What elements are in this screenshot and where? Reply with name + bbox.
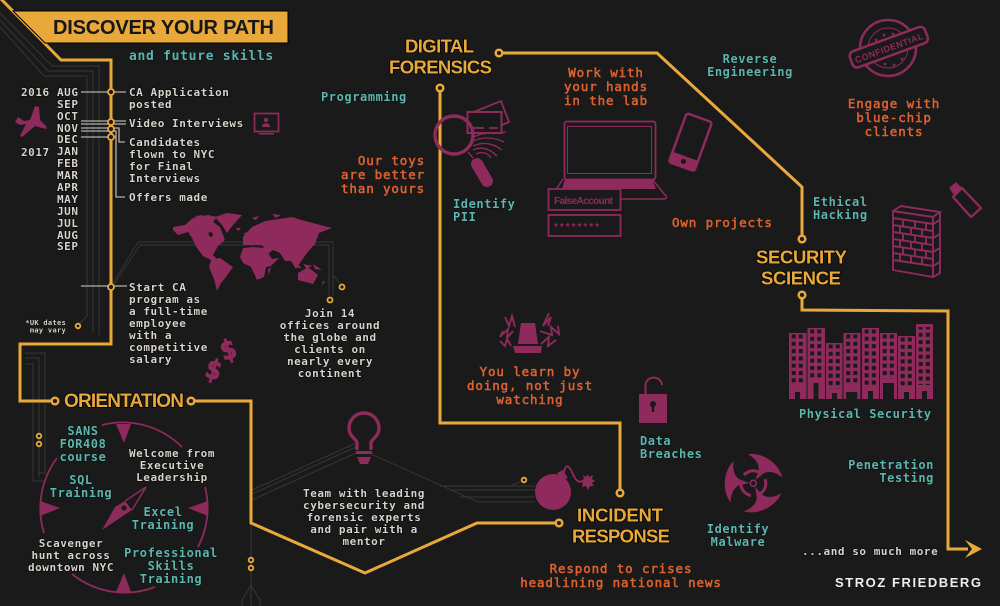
blue-chip text: blue-chip xyxy=(856,110,932,125)
icon: confidential stamp: ★ xyxy=(874,35,879,44)
timeline: start CA program text: program as xyxy=(129,293,201,306)
login box: username xyxy=(548,189,620,210)
year labels xyxy=(21,86,50,159)
timeline months: SEP xyxy=(57,98,79,111)
compass: professional skills: Skills xyxy=(148,559,194,573)
footnote: may vary xyxy=(30,326,66,334)
compass: welcome: Leadership xyxy=(136,471,208,484)
compass: scavenger: Scavenger xyxy=(39,537,103,550)
timeline: start CA program text: with a xyxy=(129,329,172,342)
digital forensics nodes xyxy=(437,50,502,91)
timeline months: JUN xyxy=(57,205,79,218)
login box: password xyxy=(548,215,620,236)
main yellow path: orientation to incident response xyxy=(191,401,557,573)
data breaches label: Breaches xyxy=(640,447,702,461)
icon: confidential stamp: CONFIDENTIAL xyxy=(854,31,925,65)
icon: dollar signs: $ xyxy=(201,353,226,388)
title banner: DISCOVER YOUR PATH xyxy=(53,17,274,39)
icon: magnifier with card and fingerprint xyxy=(435,101,509,181)
crises text: Respond to crises xyxy=(550,561,692,576)
icon: laptop xyxy=(550,122,666,199)
icon: open padlock xyxy=(639,378,667,423)
icon: confidential stamp: ★ xyxy=(900,54,905,63)
timeline months: OCT xyxy=(57,110,79,123)
timeline: candidates flown text: Interviews xyxy=(129,172,201,185)
login box: username: FalseAccount xyxy=(554,196,614,207)
timeline: start CA program text: salary xyxy=(129,353,172,366)
timeline: start CA program text: a full-time xyxy=(129,305,208,318)
digital forensics heading xyxy=(389,36,492,78)
timeline months: SEP xyxy=(57,240,79,253)
incident response heading xyxy=(572,504,670,546)
compass: welcome: Welcome from xyxy=(129,447,215,460)
penetration testing label: Testing xyxy=(879,471,934,485)
compass: excel: Excel xyxy=(143,505,183,519)
incident response heading: INCIDENT xyxy=(577,504,664,526)
penetration testing label: Penetration xyxy=(848,458,934,472)
timeline: candidates flown text: Candidates xyxy=(129,136,201,149)
compass: professional skills: Training xyxy=(140,572,202,586)
icon: airplane xyxy=(15,106,47,137)
title banner xyxy=(13,11,288,43)
hands-on text: in the lab xyxy=(564,93,648,108)
icon: brick wall xyxy=(893,206,940,277)
mentor text: and pair with a xyxy=(310,523,418,536)
learn by doing text: You learn by xyxy=(480,364,580,379)
timeline: video interviews text: Video Interviews xyxy=(129,117,244,130)
Stroz Friedberg logo: STROZ FRIEDBERG xyxy=(835,575,981,590)
timeline months: NOV xyxy=(57,122,79,135)
timeline months: AUG xyxy=(57,86,79,99)
footnote: *UK dates xyxy=(25,319,66,327)
login box: password: ******** xyxy=(554,222,599,233)
icon: confidential stamp: ★ xyxy=(891,29,896,38)
compass: excel: Training xyxy=(132,518,194,532)
security science heading xyxy=(756,246,848,288)
timeline months: MAR xyxy=(57,169,79,182)
year labels: 2017 xyxy=(21,146,50,159)
timeline: candidates flown text: flown to NYC xyxy=(129,148,215,161)
ethical hacking label: Hacking xyxy=(813,208,868,222)
icon: city buildings xyxy=(789,324,933,399)
identify PII label: PII xyxy=(453,210,476,224)
offices text: the globe and xyxy=(283,331,377,344)
mentor text: forensic experts xyxy=(307,511,421,524)
timeline: CA application text: posted xyxy=(129,98,172,111)
learn by doing text: watching xyxy=(496,392,564,407)
hands-on text: Work with xyxy=(568,65,644,80)
icon: USB drive xyxy=(949,182,981,217)
icon: bomb xyxy=(535,466,595,510)
icon: smartphone xyxy=(668,113,713,173)
main yellow path: security science to end arrow xyxy=(802,297,968,549)
timeline: CA application text: CA Application xyxy=(129,86,229,99)
compass: SQL training: SQL xyxy=(69,473,93,487)
timeline connectors xyxy=(81,92,127,286)
mentor text: mentor xyxy=(342,535,386,548)
offices text: Join 14 xyxy=(305,307,355,320)
small footnote node xyxy=(76,324,80,328)
reverse engineering label: Reverse xyxy=(723,52,777,66)
compass xyxy=(40,422,208,593)
learn by doing text: doing, not just xyxy=(467,378,593,393)
toys text: than yours xyxy=(341,181,425,196)
footnote xyxy=(25,319,66,334)
compass: professional skills: Professional xyxy=(124,546,218,560)
orientation heading: ORIENTATION xyxy=(64,391,184,412)
timeline months: APR xyxy=(57,181,79,194)
compass: scavenger: hunt across xyxy=(32,549,110,562)
year labels: 2016 xyxy=(21,86,50,99)
physical security label: Physical Security xyxy=(799,407,932,421)
timeline months: AUG xyxy=(57,229,79,242)
small paired nodes bottom xyxy=(249,558,253,570)
offices text: offices around xyxy=(280,319,380,332)
timeline months: JAN xyxy=(57,145,79,158)
toys text: are better xyxy=(341,167,425,182)
compass: SQL training: Training xyxy=(50,486,112,500)
timeline nodes xyxy=(108,89,114,290)
timeline: start CA program text: Start CA xyxy=(129,281,186,294)
so much more text: ...and so much more xyxy=(802,545,938,558)
mentor text: Team with leading xyxy=(303,487,425,500)
data breaches label: Data xyxy=(640,434,671,448)
offices text: continent xyxy=(298,367,362,380)
map nodes xyxy=(328,284,344,302)
incident response nodes xyxy=(556,490,623,526)
compass: SANS FOR408: FOR408 xyxy=(60,437,106,451)
own projects text: Own projects xyxy=(672,215,773,230)
blue-chip text: clients xyxy=(865,124,923,139)
identify malware label: Malware xyxy=(711,535,765,549)
main yellow path: discovery to orientation xyxy=(0,0,111,401)
compass: welcome: Executive xyxy=(140,459,204,472)
timeline months: FEB xyxy=(57,157,79,170)
small node near bomb xyxy=(522,478,526,482)
arrow head xyxy=(965,540,982,558)
timeline: start CA program text: competitive xyxy=(129,341,208,354)
world map xyxy=(173,213,332,291)
crises text: headlining national news xyxy=(520,575,722,590)
offices text: nearly every xyxy=(287,355,373,368)
icon: monitor with person xyxy=(254,114,278,134)
small paired nodes left xyxy=(37,434,41,446)
timeline: candidates flown text: for Final xyxy=(129,160,194,173)
reverse engineering label: Engineering xyxy=(707,65,793,79)
ethical hacking label: Ethical xyxy=(813,195,868,209)
icon: dollar signs: $ xyxy=(216,333,241,368)
compass: scavenger: downtown NYC xyxy=(28,561,114,574)
compass: SANS FOR408: course xyxy=(60,450,106,464)
timeline months xyxy=(57,86,79,253)
security science nodes xyxy=(799,236,805,298)
icon: dollar signs xyxy=(201,333,241,388)
icon: confidential stamp: ★ xyxy=(882,30,887,39)
faint circuit traces xyxy=(0,13,535,606)
security science heading: SECURITY xyxy=(756,246,848,268)
incident response heading: RESPONSE xyxy=(572,526,670,546)
icon: siren xyxy=(500,313,559,353)
icon: biohazard xyxy=(723,448,787,518)
icon: confidential stamp xyxy=(848,20,929,76)
identify malware label: Identify xyxy=(707,522,769,536)
programming label: Programming xyxy=(321,90,407,104)
icon: lightbulb xyxy=(349,413,379,464)
timeline: offers made text: Offers made xyxy=(129,191,208,204)
main yellow path: digital forensics to security science xyxy=(501,53,802,237)
mentor text: cybersecurity and xyxy=(303,499,425,512)
icon: confidential stamp: ★ xyxy=(892,60,897,69)
hands-on text: your hands xyxy=(564,79,648,94)
timeline: start CA program text: employee xyxy=(129,317,186,330)
blue-chip text: Engage with xyxy=(848,96,940,111)
subtitle: and future skills xyxy=(129,49,274,64)
digital forensics heading: DIGITAL xyxy=(405,36,474,56)
offices text: clients on xyxy=(294,343,366,356)
main yellow path: incident response to digital forensics xyxy=(440,90,620,491)
identify PII label: Identify xyxy=(453,197,515,211)
icon: confidential stamp: ★ xyxy=(883,59,888,68)
orientation nodes xyxy=(52,398,194,404)
compass: SANS FOR408: SANS xyxy=(67,424,99,438)
digital forensics heading: FORENSICS xyxy=(389,56,492,78)
timeline months: JUL xyxy=(57,217,79,230)
security science heading: SCIENCE xyxy=(761,268,841,288)
timeline months: DEC xyxy=(57,133,79,146)
toys text: Our toys xyxy=(358,153,425,168)
timeline months: MAY xyxy=(57,193,79,206)
